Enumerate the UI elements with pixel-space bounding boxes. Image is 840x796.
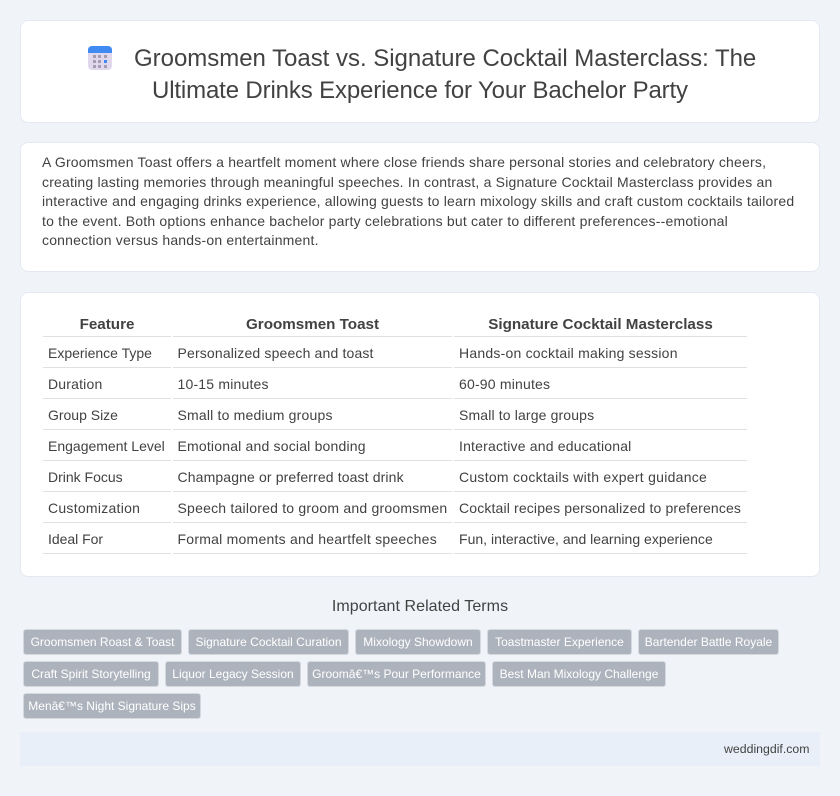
- table header: Groomsmen Toast: [246, 316, 379, 333]
- table header: Feature: [80, 316, 134, 333]
- title: Ultimate Drinks Experience for Your Bachelor Party: [152, 77, 688, 104]
- table header: [80, 316, 713, 333]
- icon: calendar: [88, 46, 112, 70]
- row: ideal for: Ideal For: [48, 531, 103, 547]
- row: drink focus: Champagne or preferred toast drink: [178, 469, 404, 485]
- row: customization: Customization: [48, 500, 140, 516]
- tag: [23, 661, 159, 687]
- tag: [638, 629, 779, 655]
- panel: title header: [20, 20, 820, 123]
- row: group size: [48, 407, 594, 423]
- intro text: interactive and engaging drinks experience, allowing guests to learn mixology skills and craft custom cocktails tailored: [42, 193, 794, 209]
- row: group size: Group Size: [48, 407, 118, 423]
- row: engagement level: Emotional and social bonding: [178, 438, 366, 454]
- intro text: creating lasting memories through meaningful speeches. In contrast, a Signature Cocktail Masterclass provides an: [42, 174, 773, 190]
- related term tags: [23, 629, 779, 719]
- row: duration: 60-90 minutes: [459, 376, 550, 392]
- tag: [492, 661, 666, 687]
- tag: Craft Spirit Storytelling: [31, 667, 151, 681]
- row: drink focus: Custom cocktails with expert guidance: [459, 469, 707, 485]
- tag: Mixology Showdown: [363, 635, 473, 649]
- intro text: A Groomsmen Toast offers a heartfelt moment where close friends share personal stories and celebratory cheers,: [42, 154, 766, 170]
- row: drink focus: [48, 469, 707, 485]
- row: engagement level: Engagement Level: [48, 438, 165, 454]
- heading: important related terms: Important Related Terms: [332, 598, 508, 615]
- row: duration: 10-15 minutes: [178, 376, 269, 392]
- tag: Bartender Battle Royale: [645, 635, 772, 649]
- tag: [23, 629, 182, 655]
- row: duration: [48, 376, 550, 392]
- tag: Best Man Mixology Challenge: [500, 667, 658, 681]
- footer credit: weddingdif.com: [724, 742, 810, 756]
- row: experience type: Personalized speech and toast: [178, 345, 374, 361]
- row: ideal for: Fun, interactive, and learning experience: [459, 531, 713, 547]
- title: [134, 45, 756, 104]
- row: drink focus: Drink Focus: [48, 469, 123, 485]
- intro text: [42, 154, 794, 248]
- row: engagement level: [48, 438, 631, 454]
- tag: [355, 629, 481, 655]
- row: experience type: Hands-on cocktail making session: [459, 345, 678, 361]
- tag: [188, 629, 349, 655]
- intro text: connection versus hands-on entertainment.: [42, 232, 319, 248]
- table header: Signature Cocktail Masterclass: [488, 316, 713, 333]
- row: duration: Duration: [48, 376, 102, 392]
- tag: [307, 661, 486, 687]
- tag: Liquor Legacy Session: [172, 667, 294, 681]
- tag: Toastmaster Experience: [495, 635, 624, 649]
- row: customization: Cocktail recipes personalized to preferences: [459, 500, 741, 516]
- panel: comparison table: [20, 292, 820, 577]
- row: experience type: Experience Type: [48, 345, 152, 361]
- tag: Menâ€™s Night Signature Sips: [28, 699, 196, 713]
- panel: introduction paragraph: [20, 142, 820, 272]
- title: Groomsmen Toast vs. Signature Cocktail Masterclass: The: [134, 45, 756, 72]
- tag: Groomâ€™s Pour Performance: [312, 667, 481, 681]
- row: group size: Small to large groups: [459, 407, 594, 423]
- tag: [487, 629, 632, 655]
- row: group size: Small to medium groups: [178, 407, 333, 423]
- tag: [23, 693, 201, 719]
- tag: Signature Cocktail Curation: [195, 635, 342, 649]
- tag: Groomsmen Roast & Toast: [31, 635, 174, 649]
- row: customization: [48, 500, 741, 516]
- footer bar: [20, 732, 820, 766]
- row: customization: Speech tailored to groom and groomsmen: [178, 500, 447, 516]
- row: experience type: [48, 345, 678, 361]
- intro text: to the event. Both options enhance bachelor party celebrations but cater to different preferences--emotional: [42, 213, 728, 229]
- tag: [165, 661, 301, 687]
- row: ideal for: Formal moments and heartfelt speeches: [178, 531, 437, 547]
- row: ideal for: [48, 531, 713, 547]
- row: engagement level: Interactive and educational: [459, 438, 631, 454]
